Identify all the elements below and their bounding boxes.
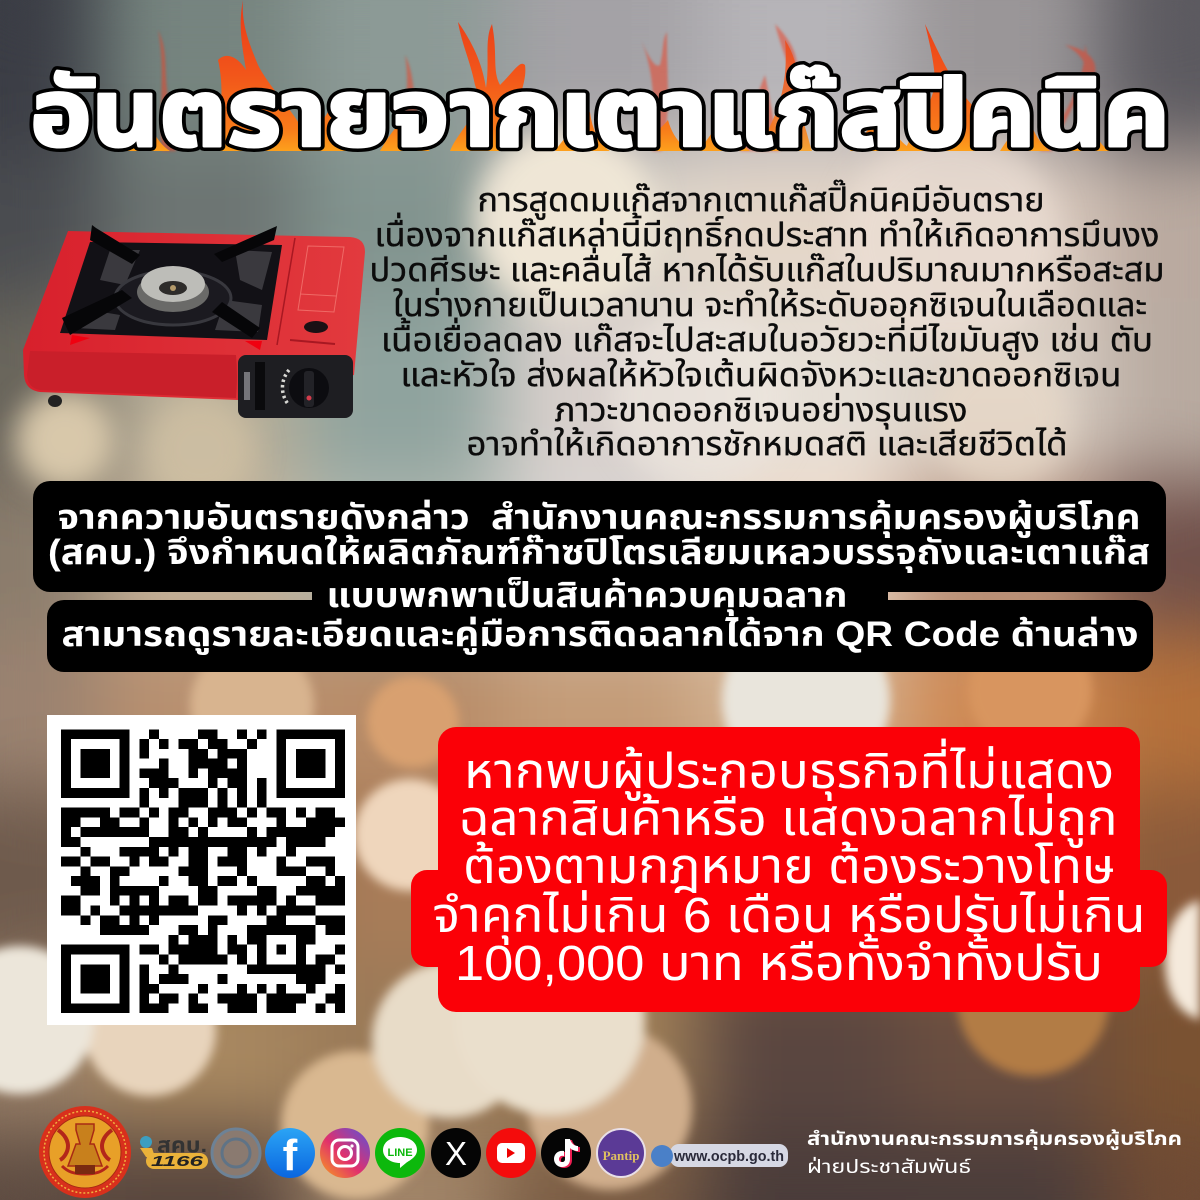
control panel: [238, 355, 353, 418]
icon: website circle: [212, 1129, 260, 1177]
icon: Pantip: Pantip: [603, 1148, 639, 1163]
body text: danger of inhaling gas: และหัวใจ ส่งผลให้หัวใจเต้นผิดจังหวะและขาดออกซิเจน: [400, 356, 1122, 393]
icon: OCPB seal: [39, 1106, 131, 1198]
body text: danger of inhaling gas: เนื้อเยื่อลดลง แก๊สจะไปสะสมในอวัยวะที่มีไขมันสูง เช่น ตับ: [381, 317, 1153, 360]
icon: LINE: [375, 1128, 425, 1178]
icon: TikTok: [541, 1128, 591, 1178]
footer text: agency name: [807, 1128, 1182, 1178]
panel: black notice: [33, 481, 1166, 672]
body text: danger of inhaling gas: ภาวะขาดออกซิเจนอย่างรุนแรง: [554, 391, 968, 430]
callout: red penalty warning: หากพบผู้ประกอบธุรกิจที่ไม่แสดง: [464, 738, 1114, 801]
burner: [115, 271, 231, 325]
panel: black notice: จากความอันตรายดังกล่าว สำนักงานคณะกรรมการคุ้มครองผู้บริโภค: [58, 498, 1140, 538]
icon: Pantip: [597, 1129, 645, 1177]
panel: black notice: แบบพกพาเป็นสินค้าควบคุมฉลาก: [326, 576, 848, 616]
icon: hotline 1166: [140, 1134, 208, 1170]
icon: website pill: [651, 1144, 788, 1167]
footer text: agency name: สำนักงานคณะกรรมการคุ้มครองผู้บริโภค: [807, 1128, 1182, 1150]
footer text: agency name: ฝ่ายประชาสัมพันธ์: [807, 1156, 971, 1178]
body text: danger of inhaling gas: [370, 179, 1164, 462]
icon: X: X: [445, 1135, 467, 1172]
body text: danger of inhaling gas: อาจทำให้เกิดอาการชักหมดสติ และเสียชีวิตได้: [466, 425, 1068, 462]
body text: danger of inhaling gas: เนื่องจากแก๊สเหล่านี้มีฤทธิ์กดประสาท ทำให้เกิดอาการมึนงง: [374, 212, 1160, 253]
icon: red portable gas stove: [23, 225, 365, 418]
callout: red penalty warning: ฉลากสินค้าหรือ แสดงฉลากไม่ถูก: [458, 792, 1118, 848]
icon: facebook: [265, 1128, 315, 1180]
callout: red penalty warning: 100,000 บาท หรือทั้งจำทั้งปรับ: [455, 933, 1103, 991]
body text: danger of inhaling gas: ในร่างกายเป็นเวลานาน จะทำให้ระดับออกซิเจนในเลือดและ: [393, 286, 1147, 323]
title: อันตรายจากเตาแก๊สปิคนิค: [30, 61, 1170, 166]
footer logos: [39, 1106, 788, 1198]
icon: X: [431, 1128, 481, 1178]
icon: facebook: f: [283, 1131, 298, 1180]
icon: YouTube: [486, 1128, 536, 1178]
flames behind title: [120, 0, 1110, 151]
panel: black notice: (สคบ.) จึงกำหนดให้ผลิตภัณฑ์ก๊าซปิโตรเลียมเหลวบรรจุถังและเตาแก๊ส: [48, 533, 1150, 573]
icon: hotline 1166: 1166: [151, 1153, 204, 1170]
callout: red penalty warning: จำคุกไม่เกิน 6 เดือน หรือปรับไม่เกิน: [432, 889, 1146, 945]
icon: instagram: [320, 1128, 370, 1178]
QR code: [47, 715, 356, 1025]
icon: website pill: www.ocpb.go.th: [673, 1148, 784, 1165]
callout: red penalty warning: ต้องตามกฎหมาย ต้องระวางโทษ: [463, 840, 1115, 894]
body text: danger of inhaling gas: การสูดดมแก๊สจากเตาแก๊สปิ๊กนิคมีอันตราย: [478, 179, 1044, 220]
callout: red penalty warning: [411, 727, 1167, 1012]
body text: danger of inhaling gas: ปวดศีรษะ และคลื่นไส้ หากได้รับแก๊สในปริมาณมากหรือสะสม: [370, 247, 1164, 288]
panel: black notice: สามารถดูรายละเอียดและคู่มือการติดฉลากได้จาก QR Code ด้านล่าง: [62, 615, 1138, 655]
icon: LINE: LINE: [387, 1147, 413, 1159]
icon: hotline 1166: สคบ.: [157, 1134, 207, 1157]
title: อันตรายจากเตาแก๊สปิคนิค: [30, 61, 1170, 166]
